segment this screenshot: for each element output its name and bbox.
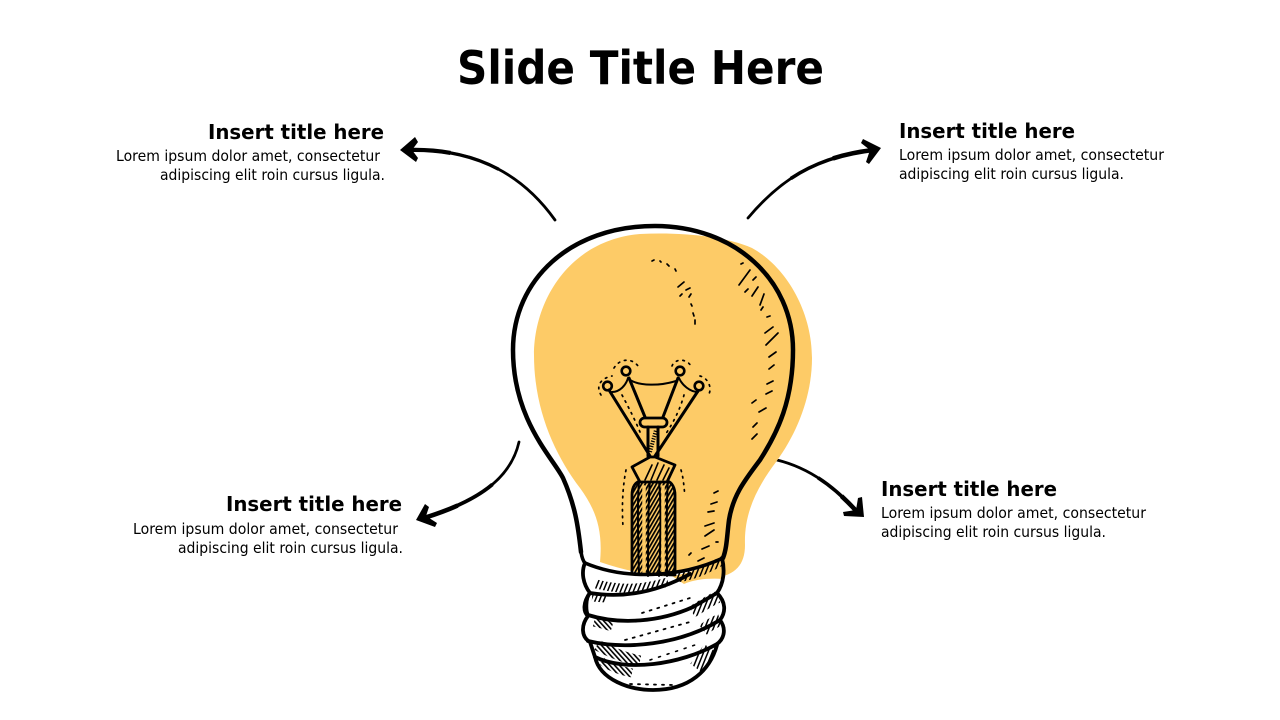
callout: bottom right bbox=[881, 477, 1147, 541]
base thread hatching bbox=[592, 562, 720, 673]
callout: top left: Insert title here bbox=[208, 120, 384, 144]
callout: bottom left: Lorem ipsum dolor amet, consectetur bbox=[133, 520, 399, 538]
icon: filament glow dots bbox=[599, 360, 710, 527]
callout: bottom left: Insert title here bbox=[226, 492, 402, 516]
icon: filament wires bbox=[603, 367, 703, 456]
callout: top right: adipiscing elit roin cursus ligula. bbox=[899, 165, 1124, 183]
callout: bottom right: Insert title here bbox=[881, 477, 1057, 501]
callout: bottom right: Lorem ipsum dolor amet, consectetur bbox=[881, 504, 1147, 522]
callout: bottom left bbox=[133, 492, 403, 557]
arrow: top right bbox=[748, 139, 881, 218]
title: Slide Title Here bbox=[457, 41, 824, 95]
callout: bottom left: adipiscing elit roin cursus ligula. bbox=[178, 539, 403, 557]
arrow: top left bbox=[400, 137, 555, 220]
callout: top right: Insert title here bbox=[899, 119, 1075, 143]
base thread outlines bbox=[583, 558, 724, 690]
callout: bottom right: adipiscing elit roin cursus ligula. bbox=[881, 523, 1106, 541]
icon: yellow colour blob bbox=[534, 234, 812, 579]
callout: top left bbox=[116, 120, 385, 184]
icon: glass highlight marks bbox=[652, 260, 778, 561]
callout: top right: Lorem ipsum dolor amet, consectetur bbox=[899, 146, 1165, 164]
icon: bulb glass outline bbox=[513, 226, 793, 558]
light bulb illustration bbox=[513, 226, 812, 690]
icon: filament support tube bbox=[632, 457, 675, 576]
icon: bulb base threads bbox=[583, 558, 724, 690]
callout: top left: Lorem ipsum dolor amet, consectetur bbox=[116, 147, 381, 165]
arrow: bottom left bbox=[416, 442, 519, 527]
arrow: bottom right bbox=[777, 460, 864, 517]
yellow tint over top thread bbox=[672, 558, 724, 584]
callout: top right bbox=[899, 119, 1165, 183]
callout: top left: adipiscing elit roin cursus ligula. bbox=[160, 166, 385, 184]
